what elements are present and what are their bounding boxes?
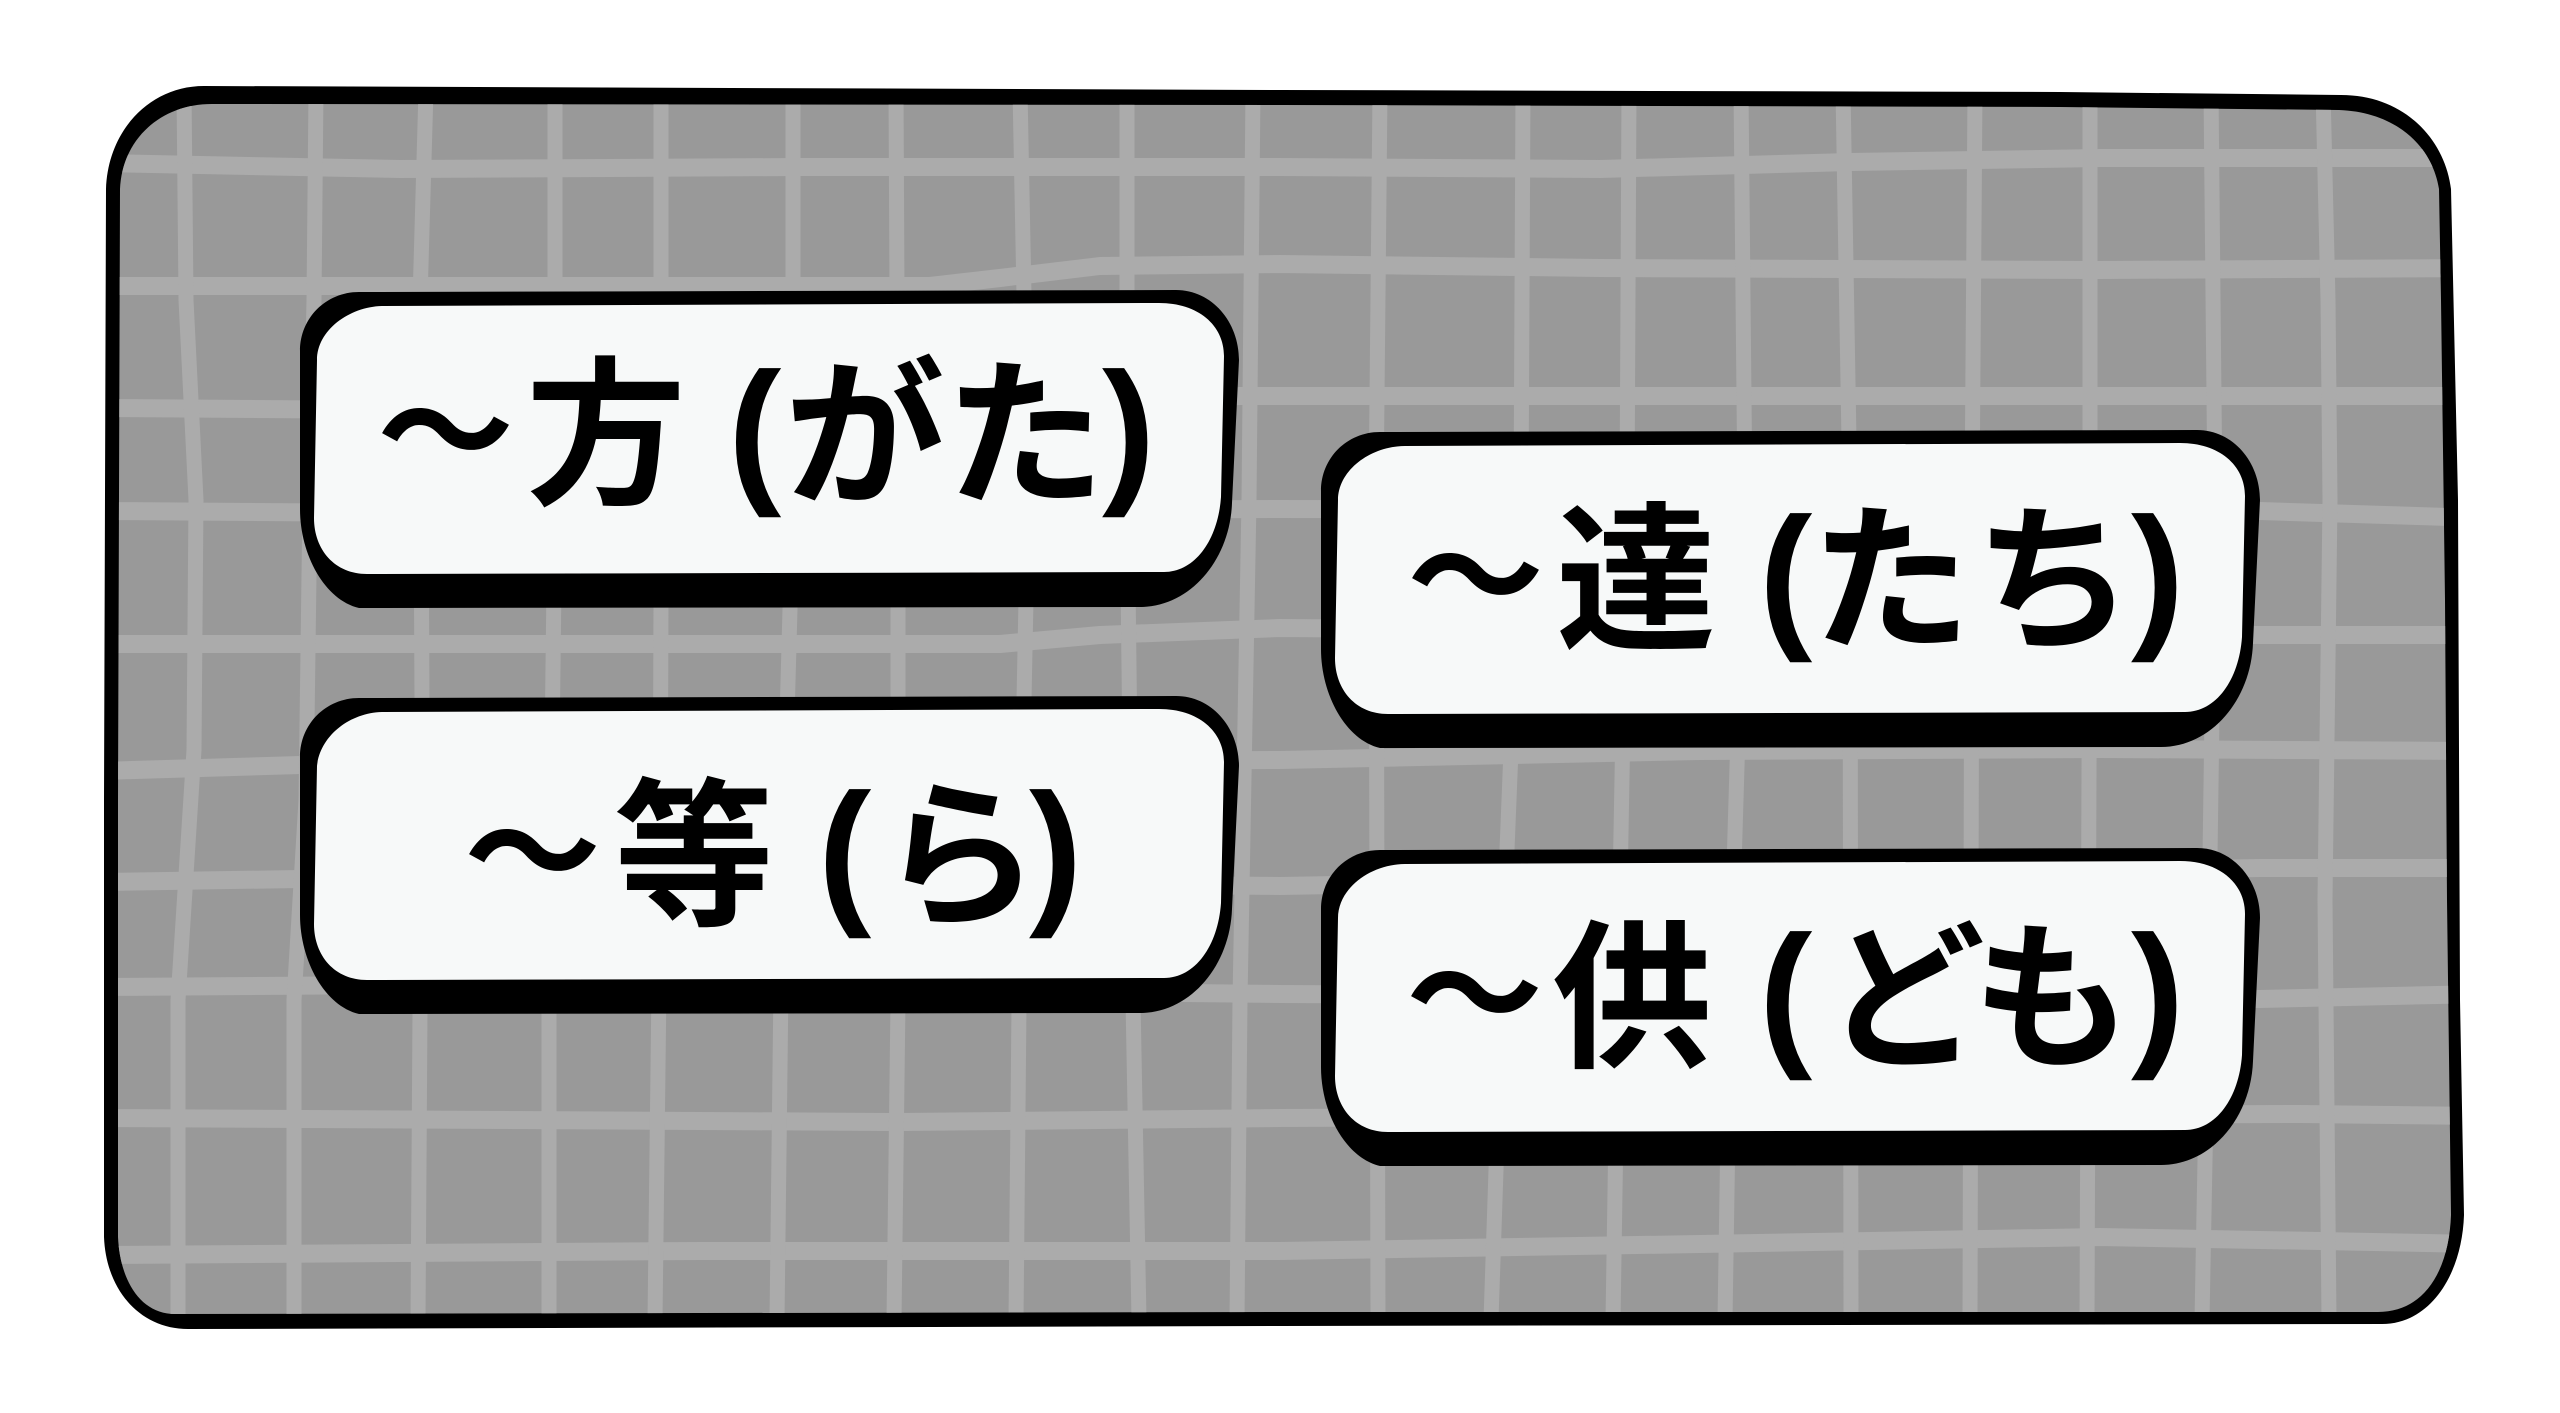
label: 供	[1552, 910, 1712, 1089]
button shape	[300, 696, 1239, 1014]
label: )	[2131, 902, 2184, 1081]
label: がた	[785, 347, 1105, 526]
label: ～	[1407, 503, 1544, 656]
label: ～	[464, 779, 601, 932]
label: ら	[880, 768, 1040, 947]
label: も	[1972, 910, 2132, 1089]
label: )	[2131, 484, 2184, 663]
button shape	[300, 290, 1239, 608]
button: ~達 (たち)	[1321, 430, 2260, 748]
panel fill	[118, 104, 2451, 1314]
button shape	[1321, 848, 2260, 1166]
button: ~供 (ども)	[1321, 848, 2260, 1166]
label: 等	[614, 768, 774, 947]
button: ~等 (ら)	[300, 696, 1239, 1014]
label: た	[1811, 492, 1971, 671]
button shape	[1321, 430, 2260, 748]
label: (	[728, 339, 782, 518]
label: ど	[1825, 910, 1985, 1089]
label: ち	[1974, 492, 2134, 671]
label: 方	[526, 347, 686, 526]
label: )	[1102, 339, 1155, 518]
label: 達	[1556, 492, 1716, 671]
label: ～	[377, 358, 514, 511]
label: (	[1759, 902, 1813, 1081]
button: ~方 (がた)	[300, 290, 1239, 608]
label: (	[818, 760, 872, 939]
label: )	[1029, 760, 1082, 939]
label: (	[1759, 484, 1813, 663]
label: ～	[1406, 921, 1543, 1074]
